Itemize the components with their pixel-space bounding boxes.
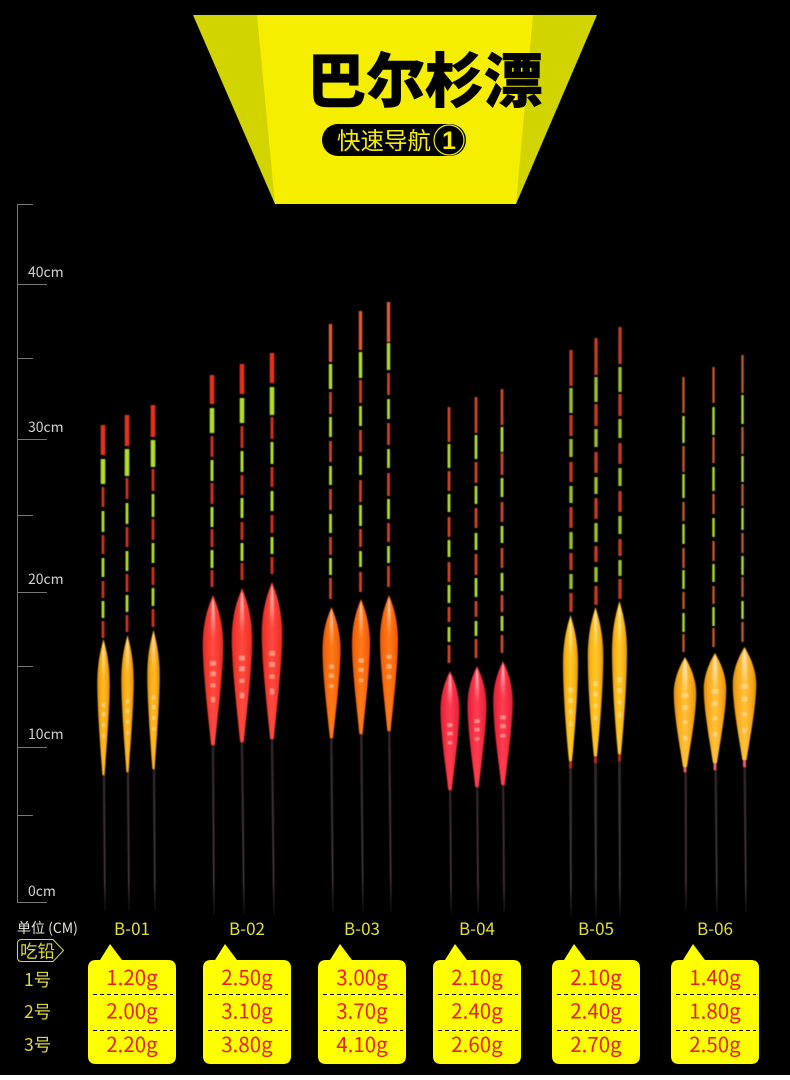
model card B-06: 1.80g	[689, 994, 741, 1024]
model card B-05: 2.40g	[570, 994, 622, 1024]
height ruler: 30cm	[28, 417, 64, 437]
lead weight tag: 吃铅	[20, 938, 55, 964]
title banner	[193, 15, 597, 204]
floats B-04	[440, 389, 513, 913]
model card B-06: 2.50g	[689, 1028, 741, 1058]
model card B-01: 1.20g	[106, 961, 158, 991]
float B-06 no.2	[704, 367, 726, 912]
model card B-05: 2.10g	[570, 961, 622, 991]
model card B-04: 2.10g	[451, 961, 503, 991]
model card B-04: 2.60g	[451, 1028, 503, 1058]
model card B-03: B-03	[344, 915, 380, 940]
model card B-01	[88, 915, 176, 1064]
height ruler: 40cm	[28, 262, 64, 282]
float B-05 no.2	[588, 338, 603, 917]
model card B-03: 3.00g	[336, 961, 388, 991]
model card B-03: 3.70g	[336, 994, 388, 1024]
row labels: 2号	[24, 999, 51, 1024]
model card B-01: B-01	[114, 915, 150, 940]
float B-03 no.1	[322, 324, 340, 912]
model card B-02: 2.50g	[221, 961, 273, 991]
model card B-05: B-05	[578, 915, 614, 940]
model card B-02: 3.80g	[221, 1028, 273, 1058]
unit label: 单位 (CM)	[17, 918, 78, 938]
floats B-01	[97, 405, 160, 910]
float B-05 no.1	[563, 350, 578, 917]
model card B-06	[671, 915, 759, 1064]
navigation pill: 1	[442, 127, 456, 155]
float B-04 no.2	[468, 397, 486, 913]
float B-01 no.1	[97, 425, 110, 910]
model card B-04: B-04	[459, 915, 495, 940]
row labels: 3号	[24, 1032, 51, 1057]
floats B-05	[563, 327, 627, 917]
model card B-01: 2.00g	[106, 994, 158, 1024]
navigation pill	[322, 122, 466, 156]
model card B-06: 1.40g	[689, 961, 741, 991]
height ruler: 0cm	[28, 881, 56, 901]
height ruler: 10cm	[28, 724, 64, 744]
float B-05 no.3	[612, 327, 627, 917]
model card B-03: 4.10g	[336, 1028, 388, 1058]
model card B-04	[433, 915, 521, 1064]
row labels	[24, 967, 51, 1057]
navigation pill: 快速导航	[337, 122, 431, 156]
row labels: 1号	[24, 967, 51, 992]
float B-04 no.1	[440, 407, 460, 913]
model card B-05: 2.70g	[570, 1028, 622, 1058]
float B-06 no.1	[674, 377, 696, 910]
floats B-02	[203, 353, 282, 915]
model card B-02	[203, 915, 291, 1064]
float B-02 no.2	[232, 364, 252, 915]
model card B-01: 2.20g	[106, 1028, 158, 1058]
float B-04 no.3	[493, 389, 513, 913]
float B-06 no.3	[733, 355, 756, 912]
float B-02 no.3	[262, 353, 282, 915]
model card B-02: B-02	[229, 915, 265, 940]
float B-01 no.3	[147, 405, 160, 910]
float B-03 no.2	[352, 311, 370, 912]
float B-02 no.1	[203, 375, 223, 915]
model card B-06: B-06	[697, 915, 733, 940]
float B-01 no.2	[121, 415, 134, 910]
model card B-04: 2.40g	[451, 994, 503, 1024]
model card B-03	[318, 915, 406, 1064]
model card B-05	[552, 915, 640, 1064]
height ruler	[17, 204, 64, 902]
model card B-02: 3.10g	[221, 994, 273, 1024]
float B-03 no.3	[380, 302, 398, 912]
floats B-06	[674, 355, 756, 912]
floats B-03	[322, 302, 398, 912]
bottom white strip	[0, 1075, 790, 1080]
heading: 巴尔杉漂	[307, 34, 543, 119]
height ruler: 20cm	[28, 569, 64, 589]
